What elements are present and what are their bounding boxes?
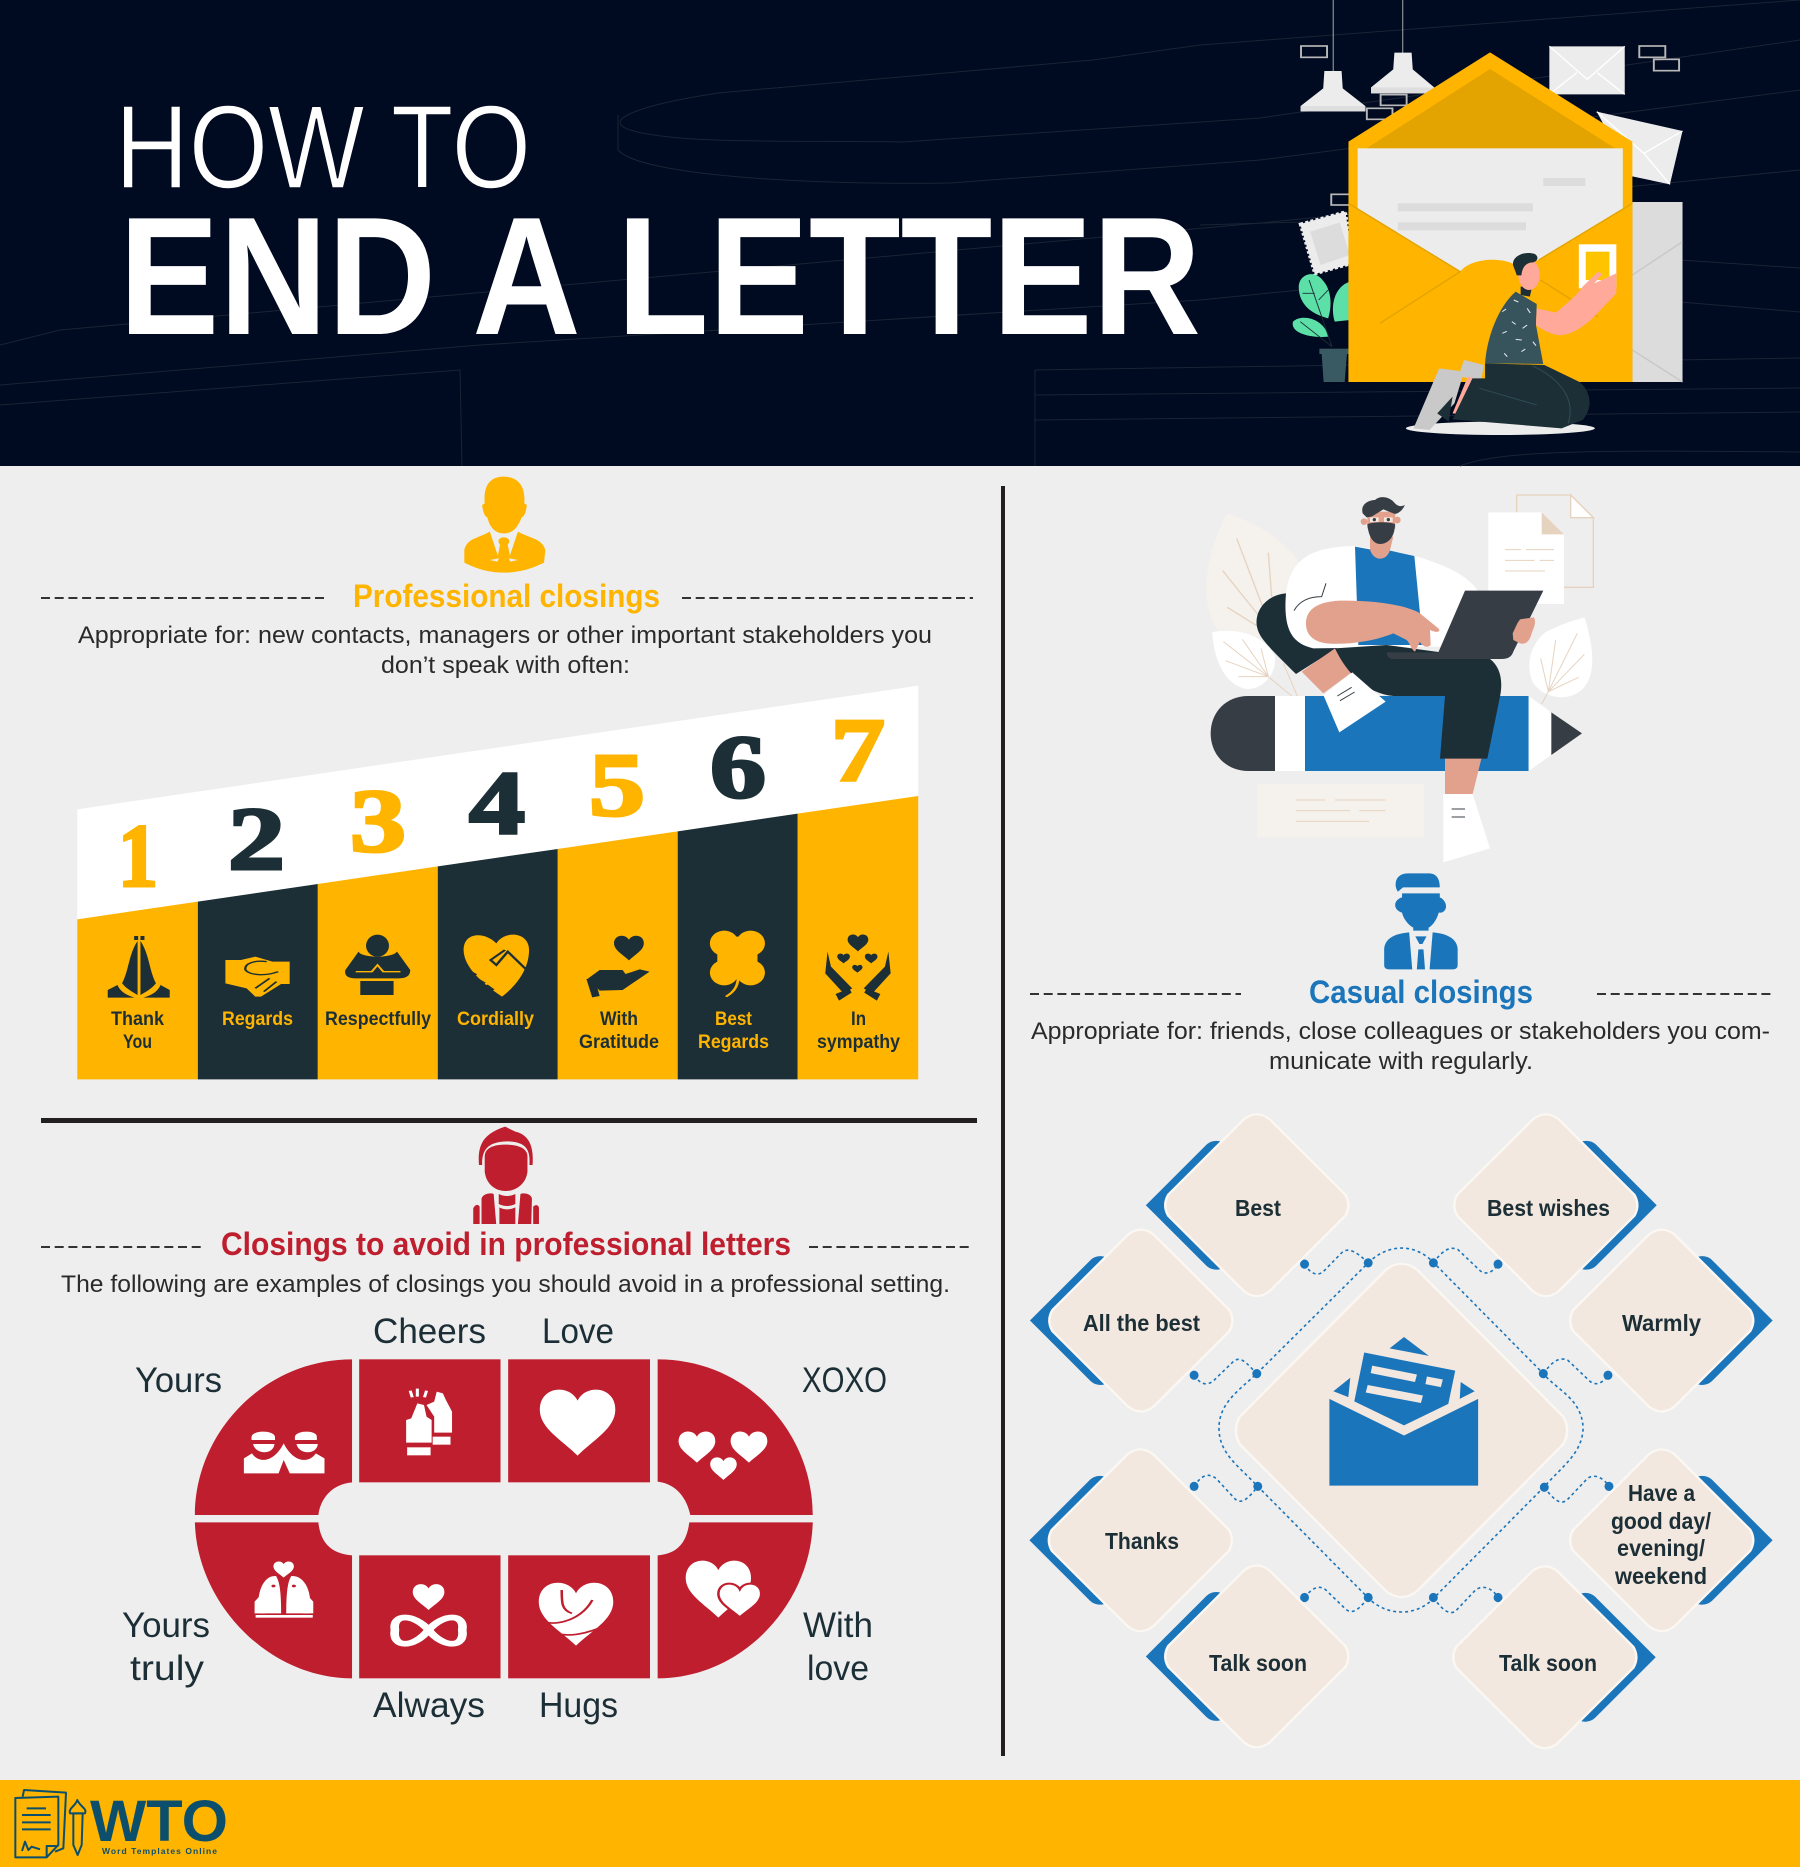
labels: Gratitude [579, 1032, 659, 1053]
header banner [0, 0, 1800, 466]
numbers: 2 [228, 790, 285, 889]
numbers: 4 [469, 754, 525, 853]
labels: Cordially [457, 1009, 534, 1030]
icon: four leaf clover [710, 931, 765, 997]
text: professional description: don’t speak with often: [381, 652, 630, 679]
ring labels [122, 1312, 887, 1725]
text: casual description: municate with regularly. [1269, 1048, 1533, 1075]
logo: Word Templates Online: Word Templates Online [102, 1846, 217, 1856]
chart: ranked professional closings [77, 686, 918, 1079]
illustration: envelope and person [1293, 0, 1683, 435]
labels: With [600, 1009, 638, 1030]
ring labels: XOXO [802, 1361, 887, 1400]
ring labels: Cheers [373, 1312, 486, 1351]
icon: hands with hearts [825, 934, 891, 1001]
logo: Word Templates Online: WTO [90, 1789, 228, 1854]
labels: You [123, 1032, 152, 1053]
ring labels: Yours [122, 1606, 210, 1645]
heading: closings to avoid: Closings to avoid in professional letters [221, 1226, 791, 1262]
diamond labels: Warmly [1622, 1310, 1701, 1336]
diamond labels: All the best [1083, 1310, 1200, 1336]
footer [0, 1780, 1800, 1867]
numbers: 6 [710, 718, 766, 817]
icon: hugging heart [539, 1583, 613, 1646]
ring labels: Always [373, 1686, 485, 1725]
ring labels: love [807, 1649, 869, 1688]
icon: double hearts [686, 1561, 761, 1618]
logo: Word Templates Online [15, 1789, 228, 1857]
text: avoid description: The following are examples of closings you should avoid in a professional setting. [61, 1271, 950, 1298]
chart: ring of closings to avoid [122, 1312, 887, 1725]
diamond labels: good day/ [1611, 1508, 1712, 1534]
labels [111, 1009, 900, 1053]
ring labels: With [803, 1606, 873, 1645]
numbers: 7 [831, 701, 885, 800]
ring labels: Hugs [539, 1686, 618, 1725]
icon: avoid person [473, 1127, 539, 1224]
diamond labels [1083, 1195, 1712, 1676]
diamond labels: Best wishes [1487, 1195, 1610, 1221]
illustration: man on pencil [1206, 495, 1593, 862]
ring labels: Love [542, 1312, 614, 1351]
numbers [118, 701, 885, 906]
text: casual description: Appropriate for: friends, close colleagues or stakeholders you com- [1031, 1018, 1770, 1045]
heading: professional closings: Professional closings [353, 578, 660, 614]
labels: Regards [698, 1032, 769, 1053]
icon: hand holding heart [586, 936, 650, 997]
icon: casual person [1384, 873, 1458, 969]
icon: professional person [464, 477, 545, 573]
text: professional description: Appropriate for: new contacts, managers or other important stakeholders you [78, 622, 932, 649]
numbers: 5 [589, 736, 645, 835]
title: HOW TO [115, 81, 531, 214]
labels: Best [715, 1009, 753, 1030]
title [115, 81, 1201, 370]
numbers: 1 [118, 807, 158, 906]
icon: heart handshake [464, 935, 529, 997]
heading: casual closings: Casual closings [1309, 974, 1533, 1010]
labels: Regards [222, 1009, 293, 1030]
icon: open envelope [1329, 1337, 1478, 1486]
icon: praying hands [108, 936, 170, 998]
labels: sympathy [817, 1032, 900, 1053]
text: casual description [1031, 1018, 1770, 1075]
title: END A LETTER [119, 182, 1201, 370]
labels: Thank [111, 1009, 164, 1030]
icon: heart [540, 1390, 615, 1456]
ring labels: truly [130, 1649, 205, 1688]
diamond labels: Talk soon [1209, 1650, 1307, 1676]
icon: infinity heart [395, 1584, 463, 1644]
ring labels: Yours [135, 1361, 222, 1400]
diamond labels: Have a [1628, 1480, 1695, 1506]
icon: high five [406, 1389, 452, 1455]
icon: bowing person [345, 935, 410, 995]
icon: couple [244, 1432, 324, 1473]
labels: In [851, 1009, 866, 1030]
icon: three hearts [679, 1432, 767, 1480]
diagram: casual closings diamonds [1029, 1114, 1773, 1748]
icon: love birds [255, 1561, 313, 1618]
diamond labels: Talk soon [1499, 1650, 1597, 1676]
numbers: 3 [350, 772, 406, 871]
labels: Respectfully [325, 1009, 431, 1030]
diamond labels: Best [1235, 1195, 1281, 1221]
icon: handshake [225, 957, 290, 997]
text: professional description [78, 622, 932, 679]
diamond labels: weekend [1614, 1563, 1707, 1589]
diamond labels: Thanks [1105, 1528, 1179, 1554]
diamond labels: evening/ [1617, 1535, 1706, 1561]
